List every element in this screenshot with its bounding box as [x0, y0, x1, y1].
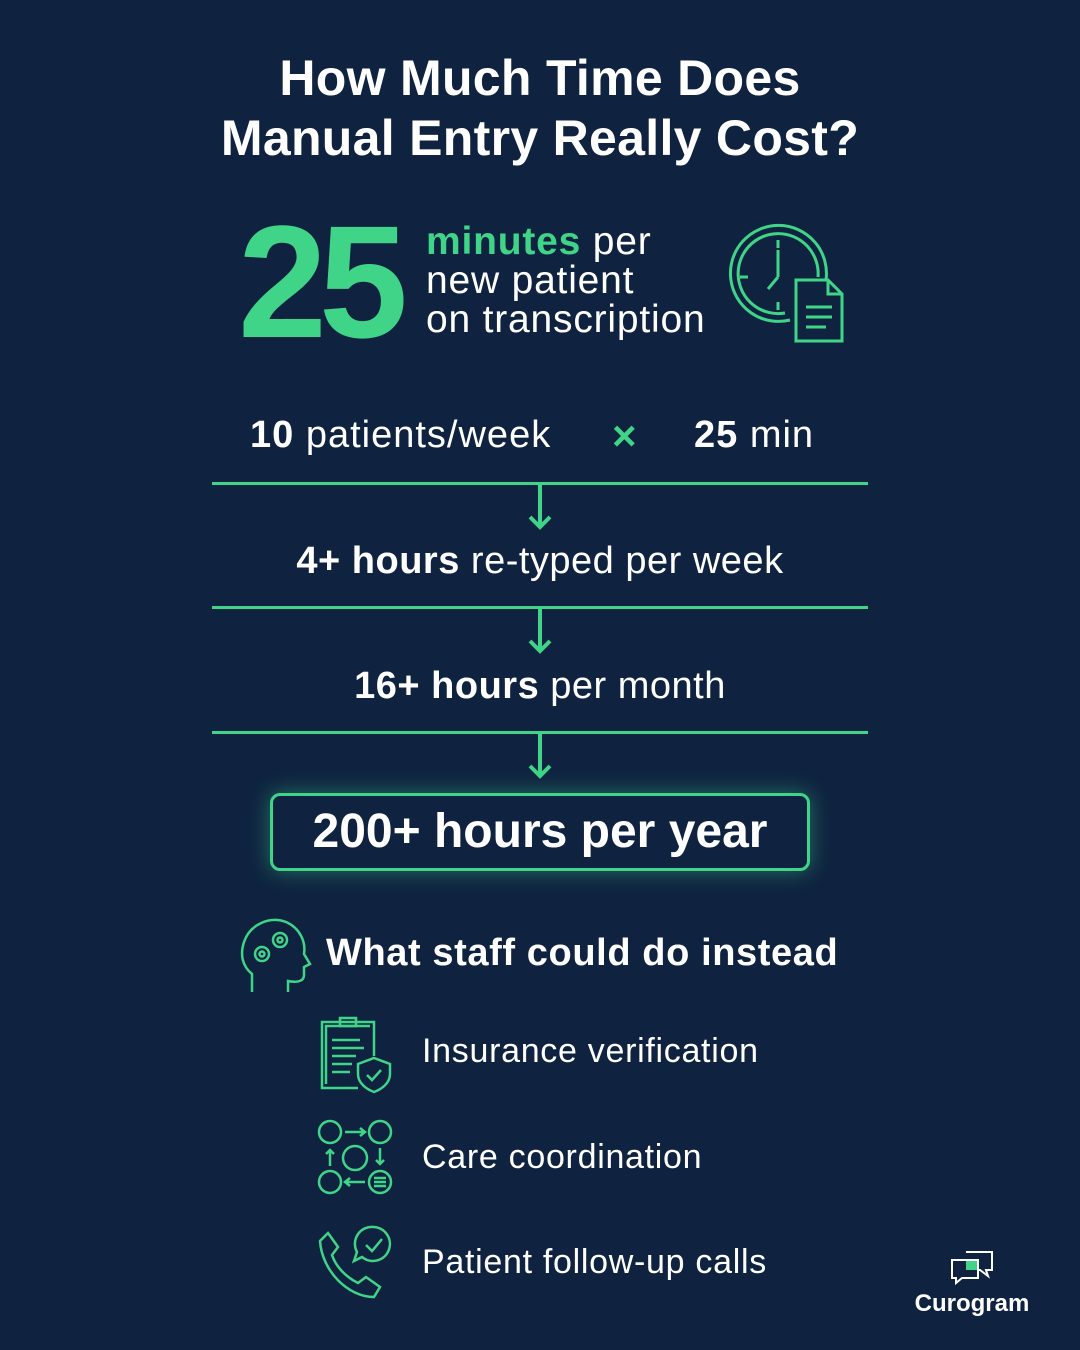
stat: 25 minutes — [238, 192, 705, 371]
highlight box: yearly hours — [270, 793, 810, 871]
item: patient follow-up calls — [318, 1226, 767, 1298]
weekly hours: 4+ hours re-typed per week — [296, 540, 784, 582]
icon: head with gears — [240, 918, 312, 992]
item: care coordination — [318, 1120, 702, 1194]
icon: phone with check bubble — [318, 1226, 392, 1298]
big number: 25 — [238, 192, 400, 371]
icon: clock with document — [728, 224, 844, 342]
icon: multiply: × — [612, 412, 638, 459]
logo: Curogram: Curogram — [915, 1290, 1029, 1317]
icon: chat bubbles — [951, 1251, 993, 1285]
calculation row: 25 min — [694, 414, 814, 456]
icon: clipboard shield — [320, 1016, 392, 1094]
arrow — [528, 609, 552, 654]
calculation row — [250, 412, 814, 459]
title — [221, 50, 859, 166]
stat description: minutes per — [426, 220, 652, 263]
icon: people network — [318, 1120, 392, 1194]
item: insurance verification — [320, 1016, 759, 1094]
title: Manual Entry Really Cost? — [221, 110, 859, 166]
logo: Curogram — [915, 1251, 1029, 1317]
arrow — [528, 734, 552, 779]
monthly hours: 16+ hours per month — [354, 665, 726, 707]
item: insurance verification: Insurance verification — [422, 1032, 759, 1070]
calculation row: 10 patients/week — [250, 414, 551, 456]
stat description — [426, 220, 705, 341]
arrow — [528, 485, 552, 530]
stat description: new patient — [426, 259, 634, 302]
stat description: on transcription — [426, 298, 705, 341]
highlight box: yearly hours: 200+ hours per year — [313, 805, 767, 858]
title: How Much Time Does — [279, 50, 801, 106]
item: patient follow-up calls: Patient follow-up calls — [422, 1243, 767, 1281]
item: care coordination: Care coordination — [422, 1138, 702, 1176]
subheading: What staff could do instead — [326, 932, 838, 974]
